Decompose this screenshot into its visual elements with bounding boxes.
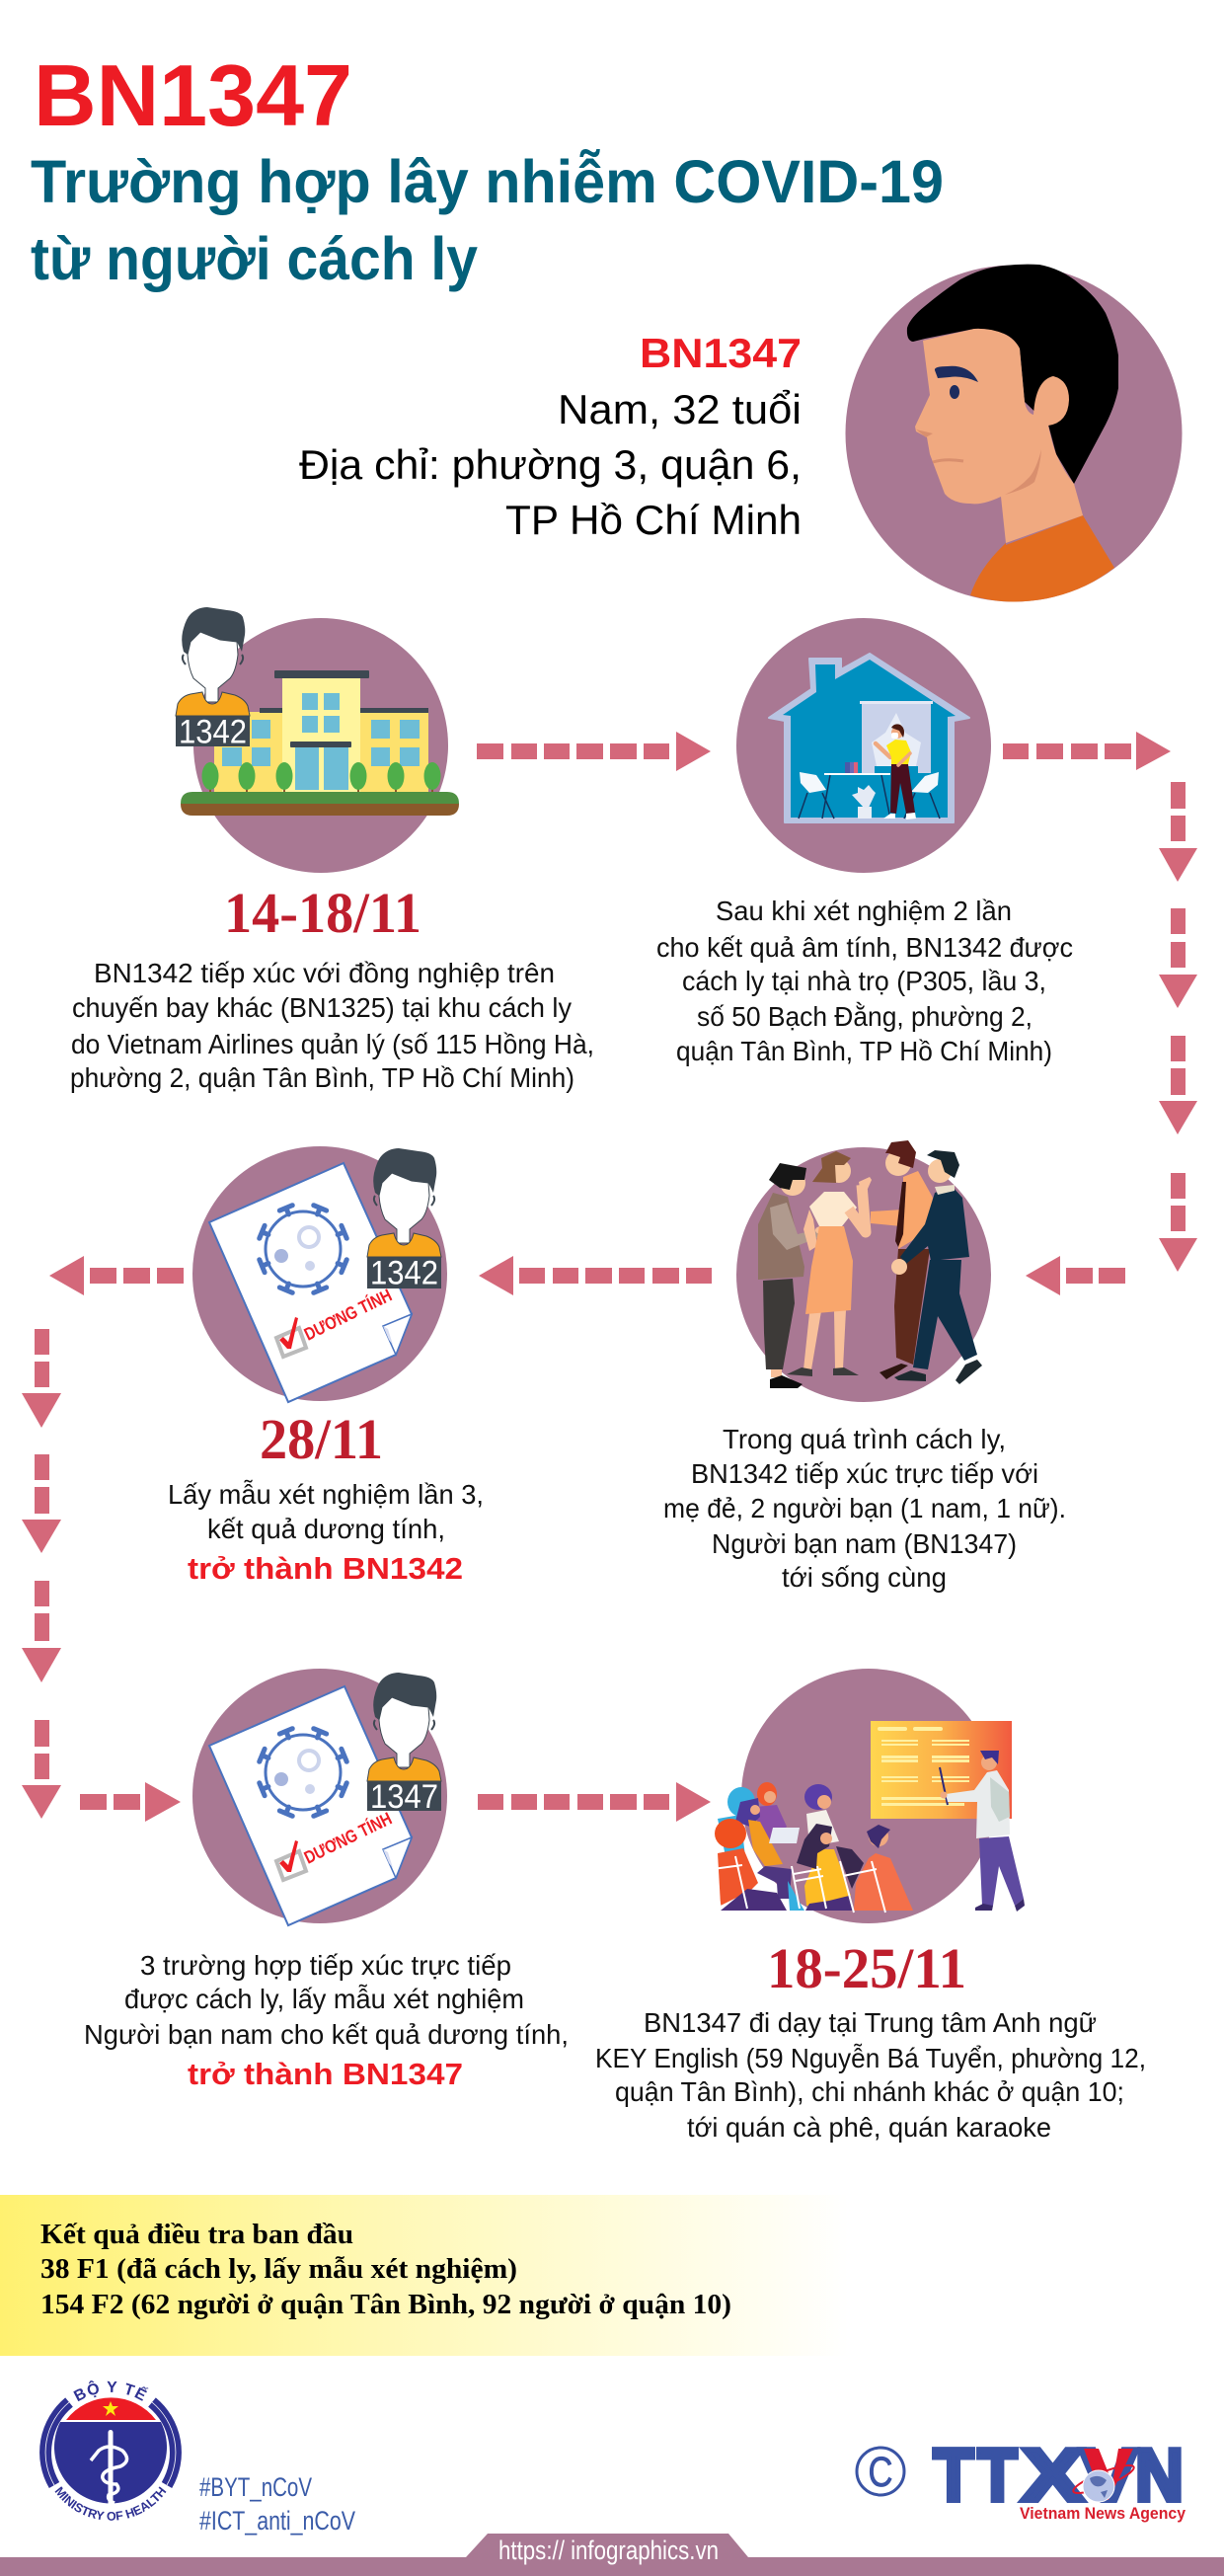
- icon: person 1342: [367, 1148, 441, 1291]
- date: 14-18/11: 14-18/11: [224, 881, 421, 945]
- icon: Ministry of Health logo: MINISTRY OF HEALTH: [55, 2486, 166, 2521]
- icon: Ministry of Health logo: BỘ Y TẾ: [73, 2381, 148, 2401]
- title: từ người cách ly: [31, 225, 478, 292]
- panel: initial investigation results: 38 F1 (đã cách ly, lấy mẫu xét nghiệm): [40, 2253, 517, 2285]
- text: negative result, quarantine in rental room: quận Tân Bình, TP Hồ Chí Minh): [676, 1036, 1052, 1066]
- hashtags: [199, 2472, 355, 2536]
- woman: [803, 1311, 821, 1369]
- icon: copyright symbol: C: [869, 2449, 892, 2496]
- text: third test positive: Lấy mẫu xét nghiệm lần 3,: [168, 1479, 484, 1510]
- text: direct contacts detail: BN1342 tiếp xúc trực tiếp với: [691, 1458, 1038, 1489]
- hashtags: #BYT_nCoV: [199, 2472, 312, 2502]
- logo: TTXVN Vietnam News Agency: Vietnam News Agency: [1020, 2504, 1186, 2523]
- text: three contacts isolated: 3 trường hợp tiếp xúc trực tiếp: [140, 1950, 511, 1981]
- text: BN1342 contact: chuyến bay khác (BN1325) tại khu cách ly: [72, 992, 572, 1023]
- arrow: left 3: [49, 1256, 184, 1295]
- logo: TTXVN Vietnam News Agency: N: [1135, 2433, 1184, 2516]
- icon: positive test report 1347: [192, 1669, 447, 1925]
- logo: TTXVN Vietnam News Agency: T: [934, 2433, 973, 2516]
- text: negative result, quarantine in rental room: số 50 Bạch Đằng, phường 2,: [697, 1001, 1033, 1032]
- patient info: BN1347: [640, 330, 802, 376]
- text: direct contacts detail: Trong quá trình cách ly,: [723, 1424, 1006, 1454]
- patient info: Nam, 32 tuổi: [558, 386, 802, 432]
- icon: four people talking: [736, 1140, 991, 1402]
- icon: positive test report 1342: [192, 1146, 447, 1402]
- text: teaching and places visited: KEY English (59 Nguyễn Bá Tuyển, phường 12,: [595, 2043, 1146, 2073]
- man in navy: [913, 1260, 977, 1369]
- icon: person 1347: 1347: [370, 1778, 438, 1816]
- icon: quarantine building: [181, 618, 459, 873]
- logo: TTXVN Vietnam News Agency: [934, 2433, 1186, 2523]
- arrow: right 1: [477, 732, 711, 771]
- text: three contacts isolated: được cách ly, lấy mẫu xét nghiệm: [124, 1984, 524, 2014]
- text: direct contacts detail: mẹ đẻ, 2 người bạn (1 nam, 1 nữ).: [663, 1493, 1066, 1523]
- panel: rental room: [656, 618, 1073, 1066]
- icon: classroom with teacher: [711, 1669, 1025, 1923]
- text: direct contacts detail: [663, 1424, 1066, 1593]
- text: three contacts isolated: trở thành BN1347: [188, 2057, 463, 2091]
- arrow: down left side: [22, 1329, 61, 1819]
- text: direct contacts detail: tới sống cùng: [782, 1562, 947, 1593]
- logo: TTXVN Vietnam News Agency: T: [977, 2433, 1017, 2516]
- patient info: Địa chỉ: phường 3, quận 6,: [299, 441, 802, 488]
- text: direct contacts detail: Người bạn nam (BN1347): [712, 1528, 1017, 1559]
- icon: person 1342: [176, 607, 250, 750]
- text: negative result, quarantine in rental room: cho kết quả âm tính, BN1342 được: [656, 932, 1073, 963]
- logo: TTXVN Vietnam News Agency: X: [1022, 2433, 1084, 2516]
- icon: person 1347: [367, 1673, 441, 1816]
- arrow: right 2: [1003, 732, 1171, 770]
- panel: initial investigation results: 154 F2 (62 người ở quận Tân Bình, 92 người ở quận 10): [40, 2289, 731, 2320]
- icon: person 1342: 1342: [179, 713, 247, 750]
- title: BN1347: [34, 46, 352, 144]
- text: teaching and places visited: quận Tân Bình), chi nhánh khác ở quận 10;: [615, 2076, 1124, 2107]
- panel: initial investigation results: [0, 2195, 849, 2356]
- panel: initial investigation results: Kết quả điều tra ban đầu: [40, 2219, 353, 2250]
- text: teaching and places visited: BN1347 đi dạy tại Trung tâm Anh ngữ: [644, 2007, 1097, 2038]
- title: [31, 46, 944, 292]
- text: teaching and places visited: [595, 2007, 1146, 2143]
- students: [727, 1787, 755, 1817]
- panel: BN1347 positive: [84, 1669, 569, 2091]
- text: third test positive: [168, 1479, 484, 1586]
- arrow: left 2: [479, 1256, 712, 1295]
- teacher: [979, 1836, 1024, 1906]
- panel: direct contacts: [663, 1140, 1066, 1593]
- arrow: left 1: [1026, 1256, 1125, 1295]
- icon: person 1342: 1342: [370, 1254, 438, 1291]
- icon: copyright symbol: [857, 2448, 904, 2496]
- man in orange: [894, 1249, 930, 1365]
- panel: 28/11 positive: [168, 1146, 484, 1586]
- text: three contacts isolated: Người bạn nam cho kết quả dương tính,: [84, 2019, 569, 2050]
- footer bar with website: https:// infographics.vn: [498, 2536, 719, 2565]
- mother: [763, 1279, 795, 1369]
- footer bar with website: [0, 2534, 1224, 2576]
- icon: patient portrait: [845, 265, 1183, 602]
- date: 28/11: 28/11: [260, 1407, 383, 1471]
- panel: 14-18/11 quarantine site: [70, 607, 594, 1093]
- icon: positive test report 1342: DƯƠNG TÍNH: [301, 1285, 395, 1345]
- arrow: right 3: [80, 1782, 181, 1822]
- text: BN1342 contact: BN1342 tiếp xúc với đồng nghiệp trên: [94, 958, 555, 988]
- text: negative result, quarantine in rental room: [656, 896, 1073, 1066]
- text: negative result, quarantine in rental room: cách ly tại nhà trọ (P305, lầu 3,: [682, 966, 1046, 996]
- text: BN1342 contact: phường 2, quận Tân Bình, TP Hồ Chí Minh): [70, 1062, 574, 1093]
- arrow: right 4: [478, 1782, 711, 1822]
- patient info: TP Hồ Chí Minh: [505, 497, 802, 543]
- text: BN1342 contact: [70, 958, 594, 1093]
- hashtags: #ICT_anti_nCoV: [199, 2506, 355, 2536]
- icon: Ministry of Health logo: [39, 2381, 182, 2521]
- icon: house with masked person: [736, 618, 991, 873]
- text: third test positive: trở thành BN1342: [188, 1551, 463, 1586]
- text: negative result, quarantine in rental room: Sau khi xét nghiệm 2 lần: [716, 896, 1012, 926]
- text: BN1342 contact: do Vietnam Airlines quản lý (số 115 Hồng Hà,: [71, 1029, 594, 1059]
- title: Trường hợp lây nhiễm COVID-19: [31, 148, 944, 215]
- date: 18-25/11: 18-25/11: [767, 1936, 966, 2000]
- arrow: down right side: [1159, 782, 1197, 1272]
- text: three contacts isolated: [84, 1950, 569, 2091]
- panel: 18-25/11 teaching: [595, 1669, 1146, 2143]
- icon: positive test report 1347: DƯƠNG TÍNH: [301, 1808, 395, 1868]
- text: teaching and places visited: tới quán cà phê, quán karaoke: [687, 2112, 1051, 2143]
- patient info: [299, 330, 802, 543]
- text: third test positive: kết quả dương tính,: [207, 1514, 445, 1544]
- logo: TTXVN Vietnam News Agency: V: [1080, 2433, 1137, 2516]
